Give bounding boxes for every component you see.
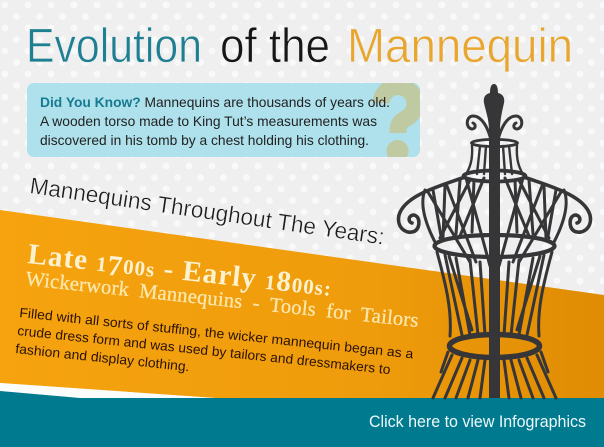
scroll [467, 116, 491, 140]
lower wires [437, 252, 485, 336]
rings [434, 139, 554, 358]
title: of the [220, 20, 330, 73]
orange diagonal band [0, 210, 604, 398]
footer bar [0, 391, 604, 447]
body text: crude dress form and was used by tailors and dressmakers to [17, 323, 391, 377]
era heading: - Early 1800s: [162, 253, 332, 301]
neck wires [465, 145, 486, 176]
did you know text: A wooden torso made to King Tut’s measurements was [40, 113, 377, 129]
era heading: 7 [106, 250, 124, 283]
torso wires [423, 190, 436, 244]
era heading: Late 1 [26, 238, 108, 277]
footer link text: Click here to view Infographics [369, 413, 586, 431]
icon: question mark [381, 87, 415, 162]
panel: did you know [27, 83, 420, 162]
body text: Filled with all sorts of stuffing, the wicker mannequin began as a [19, 305, 415, 361]
did you know text [40, 94, 390, 148]
body text: fashion and display clothing. [15, 341, 190, 374]
title: Mannequin [347, 20, 573, 73]
title: Evolution [26, 20, 202, 73]
shoulder [399, 177, 465, 232]
white wedge [0, 383, 215, 398]
pole and finial [484, 84, 504, 398]
title [26, 20, 573, 73]
section heading: Mannequins Throughout The Years: [28, 172, 386, 250]
mannequin illustration [399, 84, 590, 398]
era heading: 00s [122, 254, 156, 282]
did you know text: Did You Know? Mannequins are thousands of years old. [40, 94, 390, 110]
did you know text: discovered in his tomb by a chest holding his clothing. [40, 132, 369, 148]
era subheading: Wickerwork Mannequins - Tools for Tailors [24, 268, 420, 332]
